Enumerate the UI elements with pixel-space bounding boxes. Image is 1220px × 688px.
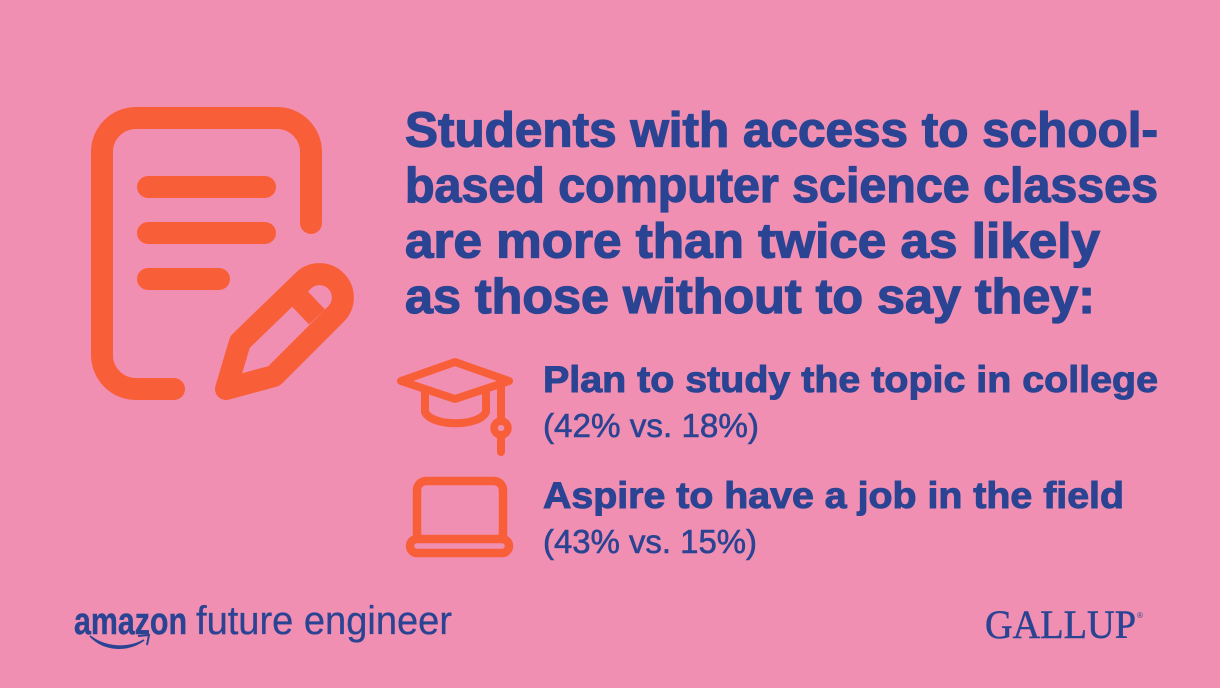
logo: amazon future engineer xyxy=(74,599,452,648)
item: job in the field: (43% vs. 15%) xyxy=(543,523,757,560)
icon: document with pencil xyxy=(102,118,343,389)
icon: laptop xyxy=(410,481,509,553)
heading: Students with access to school- xyxy=(405,104,1158,158)
item: study in college xyxy=(543,359,1158,444)
heading: are more than twice as likely xyxy=(405,214,1100,268)
logo: amazon future engineer: future engineer xyxy=(196,599,452,643)
heading xyxy=(405,104,1158,324)
icon: graduation cap xyxy=(401,362,509,452)
heading: as those without to say they: xyxy=(405,270,1095,324)
item: study in college: Plan to study the topic in college xyxy=(543,359,1158,400)
item: study in college: (42% vs. 18%) xyxy=(543,407,759,444)
logo: amazon future engineer: amazon xyxy=(74,601,187,643)
logo: Gallup: GALLUP xyxy=(985,602,1136,647)
item: job in the field xyxy=(543,475,1124,560)
logo: Gallup: ® xyxy=(1137,611,1143,620)
heading: based computer science classes xyxy=(405,159,1158,213)
item: job in the field: Aspire to have a job in the field xyxy=(543,475,1124,516)
